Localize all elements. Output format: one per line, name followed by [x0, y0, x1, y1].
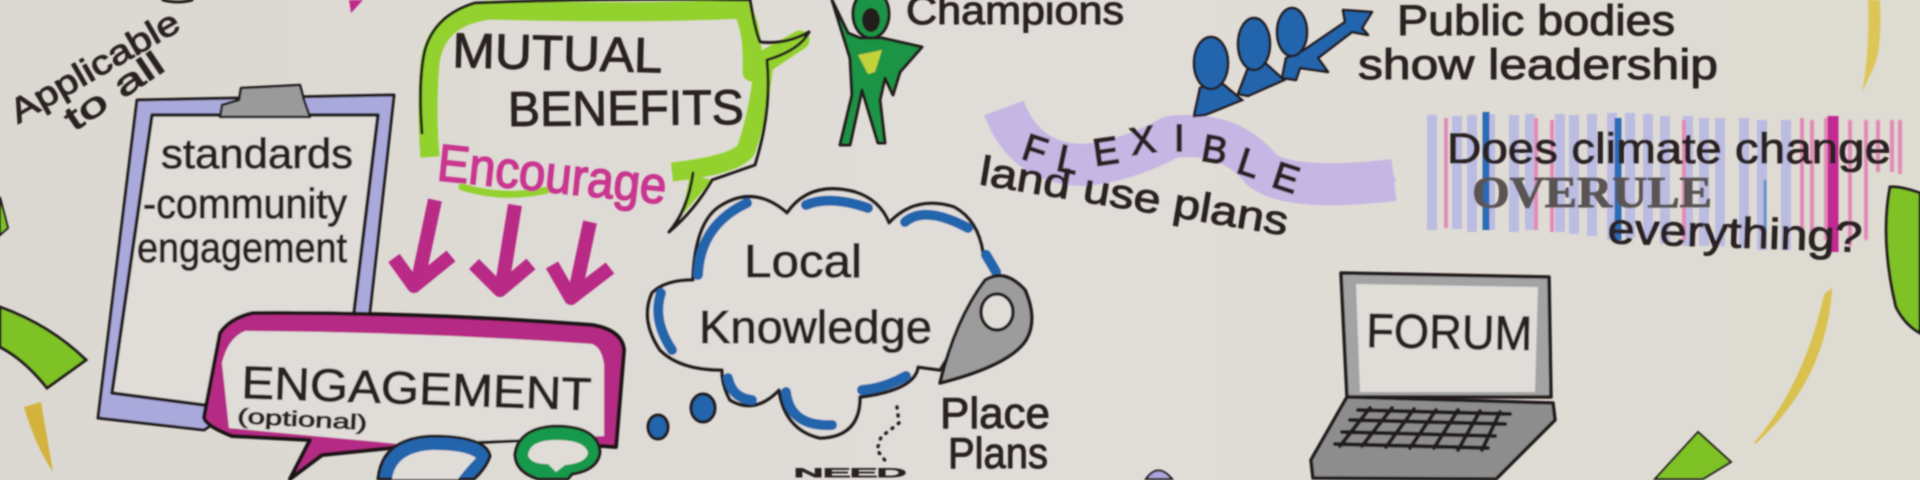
icon: blue people pointing — [1194, 8, 1372, 116]
label: place plans: Plans — [948, 429, 1048, 478]
label: public bodies show leadership: show leadership — [1358, 41, 1718, 89]
thought cloud: local knowledge — [648, 189, 999, 439]
question block: does climate change overrule everything: Does climate change — [1447, 125, 1891, 173]
label: public bodies show leadership — [1358, 0, 1718, 89]
ribbon: flexible land use plans: land use plans — [977, 148, 1292, 244]
encourage label with arrows: Encourage — [435, 134, 670, 216]
question block: does climate change overrule everything — [1432, 112, 1900, 262]
question block: does climate change overrule everything: OVERULE — [1472, 168, 1712, 217]
speech bubble: mutual benefits: BENEFITS — [508, 81, 744, 137]
encourage label with arrows — [394, 134, 670, 298]
ribbon: flexible land use plans: FLEXIBLE — [1017, 118, 1304, 202]
speech bubble: mutual benefits — [421, 0, 809, 232]
clipboard: standards — [98, 85, 394, 430]
label: place plans: Place — [940, 389, 1050, 438]
icon: blue and green chat bubbles — [378, 426, 600, 479]
label: place plans — [940, 389, 1050, 478]
speech bubble: mutual benefits: MUTUAL — [452, 24, 663, 83]
clipboard: standards: -community — [143, 180, 347, 227]
note: applicable to all — [3, 3, 187, 139]
question block: does climate change overrule everything: everything? — [1607, 205, 1863, 262]
note: applicable to all: Applicable — [3, 3, 187, 131]
speech bubble: engagement — [204, 313, 624, 479]
thought cloud: local knowledge: Knowledge — [699, 301, 932, 353]
figure: green champion — [832, 0, 922, 145]
clipboard: standards: standards — [161, 130, 353, 177]
speech bubble: engagement: ENGAGEMENT — [241, 356, 592, 420]
speech bubble: engagement: (optional) — [237, 405, 368, 435]
clipboard: standards: engagement — [137, 224, 347, 271]
label: need: NEED — [794, 466, 907, 480]
icon: laptop with forum — [1311, 273, 1555, 479]
note: applicable to all: to all — [57, 44, 171, 139]
dotted connector — [877, 407, 899, 463]
ribbon: flexible land use plans — [977, 108, 1396, 244]
icon: map pin — [940, 276, 1032, 383]
thought cloud: local knowledge: Local — [744, 235, 862, 287]
icon: laptop with forum: FORUM — [1366, 305, 1533, 361]
